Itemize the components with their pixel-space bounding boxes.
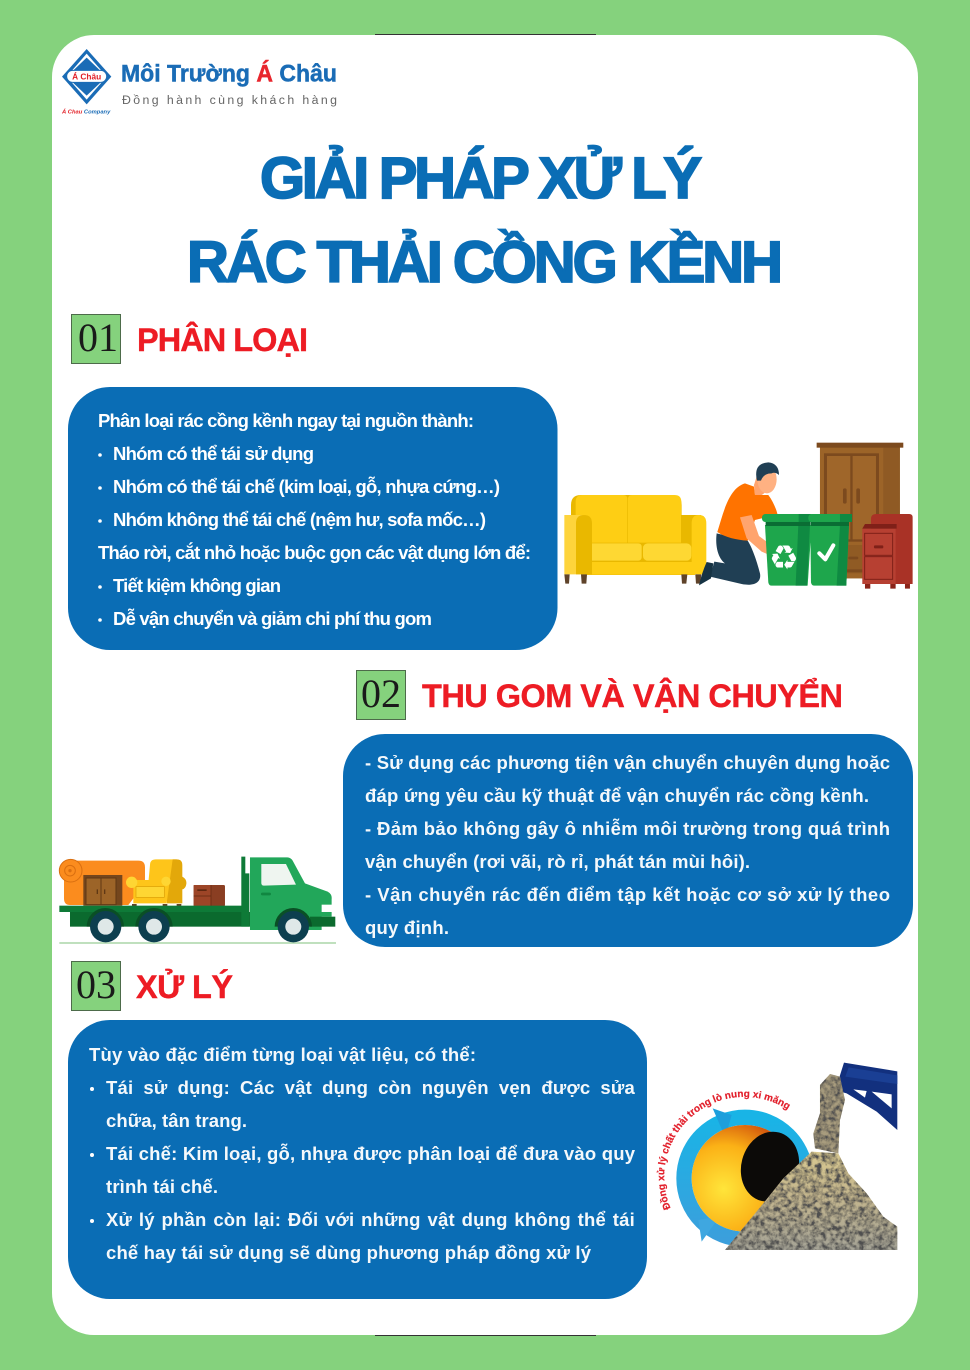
- section 01 heading: PHÂN LOẠI: [137, 321, 308, 358]
- panel: thu gom và vận chuyển: - Đảm bảo không gây ô nhiễm môi trường trong quá trình: [365, 818, 890, 839]
- curved label: Đồng xử lý chất thải trong lò nung xi măng: [656, 1091, 790, 1210]
- section 02 heading: THU GOM VÀ VẬN CHUYỂN: [422, 677, 843, 714]
- section 03 heading: 03: [76, 962, 116, 1007]
- icon: wardrobe: [817, 443, 903, 578]
- icon: recycling bin: [762, 514, 812, 586]
- icon: truck wheels: [87, 908, 312, 942]
- icon: check bin: [808, 514, 852, 586]
- panel: phân loại: Nhóm không thể tái chế (nệm hư, sofa mốc…): [113, 509, 486, 530]
- title: RÁC THẢI CỒNG KỀNH: [187, 230, 783, 295]
- panel: thu gom và vận chuyển: vận chuyển (rơi vãi, rò rỉ, phát tán mùi hôi).: [365, 851, 750, 872]
- icon: conveyor: [837, 1063, 897, 1130]
- icon: small cabinet: [194, 885, 225, 906]
- logo: [61, 49, 337, 116]
- panel: phân loại: Tháo rời, cắt nhỏ hoặc buộc gọn các vật dụng lớn để:: [98, 542, 531, 563]
- illustration: cement kiln co-processing: [656, 1062, 898, 1250]
- icon: truck body: [59, 857, 335, 930]
- icon: small wardrobe: [83, 875, 122, 906]
- icon: fire: [692, 1125, 807, 1232]
- ground line: [59, 942, 336, 944]
- illustration: furniture and man sorting waste: [564, 443, 913, 589]
- illustration: truck: [59, 857, 336, 944]
- panel: xử lý: chữa, tân trang.: [106, 1110, 247, 1131]
- section 02 heading: 02: [361, 671, 401, 716]
- icon: falling waste and pile: [725, 1074, 897, 1250]
- panel: xử lý: Xử lý phần còn lại: Đối với những vật dụng không thể tái: [106, 1209, 635, 1230]
- panel: xử lý: Tùy vào đặc điểm từng loại vật liệu, có thể:: [89, 1044, 476, 1065]
- panel: thu gom và vận chuyển: [343, 734, 913, 947]
- panel: xử lý: trình tái chế.: [106, 1176, 218, 1197]
- panel: phân loại: [68, 387, 558, 650]
- panel: thu gom và vận chuyển: quy định.: [365, 917, 449, 938]
- panel: thu gom và vận chuyển: đáp ứng yêu cầu kỹ thuật để vận chuyển rác cồng kềnh.: [365, 785, 869, 806]
- panel: thu gom và vận chuyển: - Sử dụng các phương tiện vận chuyển chuyên dụng hoặc: [365, 752, 890, 773]
- panel: phân loại: Nhóm có thể tái chế (kim loại, gỗ, nhựa cứng…): [113, 476, 500, 497]
- icon: man: [699, 462, 779, 585]
- icon: sofa: [564, 495, 706, 584]
- logo slogan: Đồng hành cùng khách hàng: [122, 93, 337, 107]
- section 03 heading: XỬ LÝ: [136, 968, 233, 1005]
- icon: recycling bin: ♻: [771, 545, 797, 573]
- logo name: Môi Trường Á Châu: [121, 60, 337, 88]
- title: [187, 146, 783, 295]
- icon: logo diamond: Á Châu: [72, 72, 101, 82]
- panel: phân loại: Nhóm có thể tái sử dụng: [113, 443, 314, 464]
- panel: phân loại: Tiết kiệm không gian: [113, 575, 281, 596]
- panel: phân loại: Dễ vận chuyển và giảm chi phí thu gom: [113, 608, 432, 629]
- panel: phân loại: Phân loại rác cồng kềnh ngay tại nguồn thành:: [98, 410, 474, 431]
- panel: xử lý: [68, 1020, 647, 1299]
- icon: blue ring: [684, 1108, 806, 1242]
- icon: red cabinet: [862, 514, 913, 589]
- section 03 heading: [72, 962, 233, 1010]
- section 02 heading: [356, 670, 843, 720]
- panel: xử lý: chế hay tái sử dụng sẽ dùng phương pháp đồng xử lý: [106, 1242, 592, 1263]
- icon: rolled sofa: [59, 859, 145, 905]
- panel: xử lý: Tái sử dụng: Các vật dụng còn nguyên vẹn được sửa: [106, 1077, 635, 1098]
- panel: xử lý: Tái chế: Kim loại, gỗ, nhựa được phân loại để đưa vào quy: [106, 1143, 636, 1164]
- panel: thu gom và vận chuyển: - Vận chuyển rác đến điểm tập kết hoặc cơ sở xử lý theo: [365, 884, 890, 905]
- title: GIẢI PHÁP XỬ LÝ: [260, 146, 702, 211]
- section 01 heading: [72, 314, 308, 364]
- logo tagline small: Á Chau Company: [61, 109, 111, 116]
- icon: armchair: [126, 859, 186, 906]
- icon: logo diamond: [62, 49, 111, 104]
- section 01 heading: 01: [78, 315, 118, 360]
